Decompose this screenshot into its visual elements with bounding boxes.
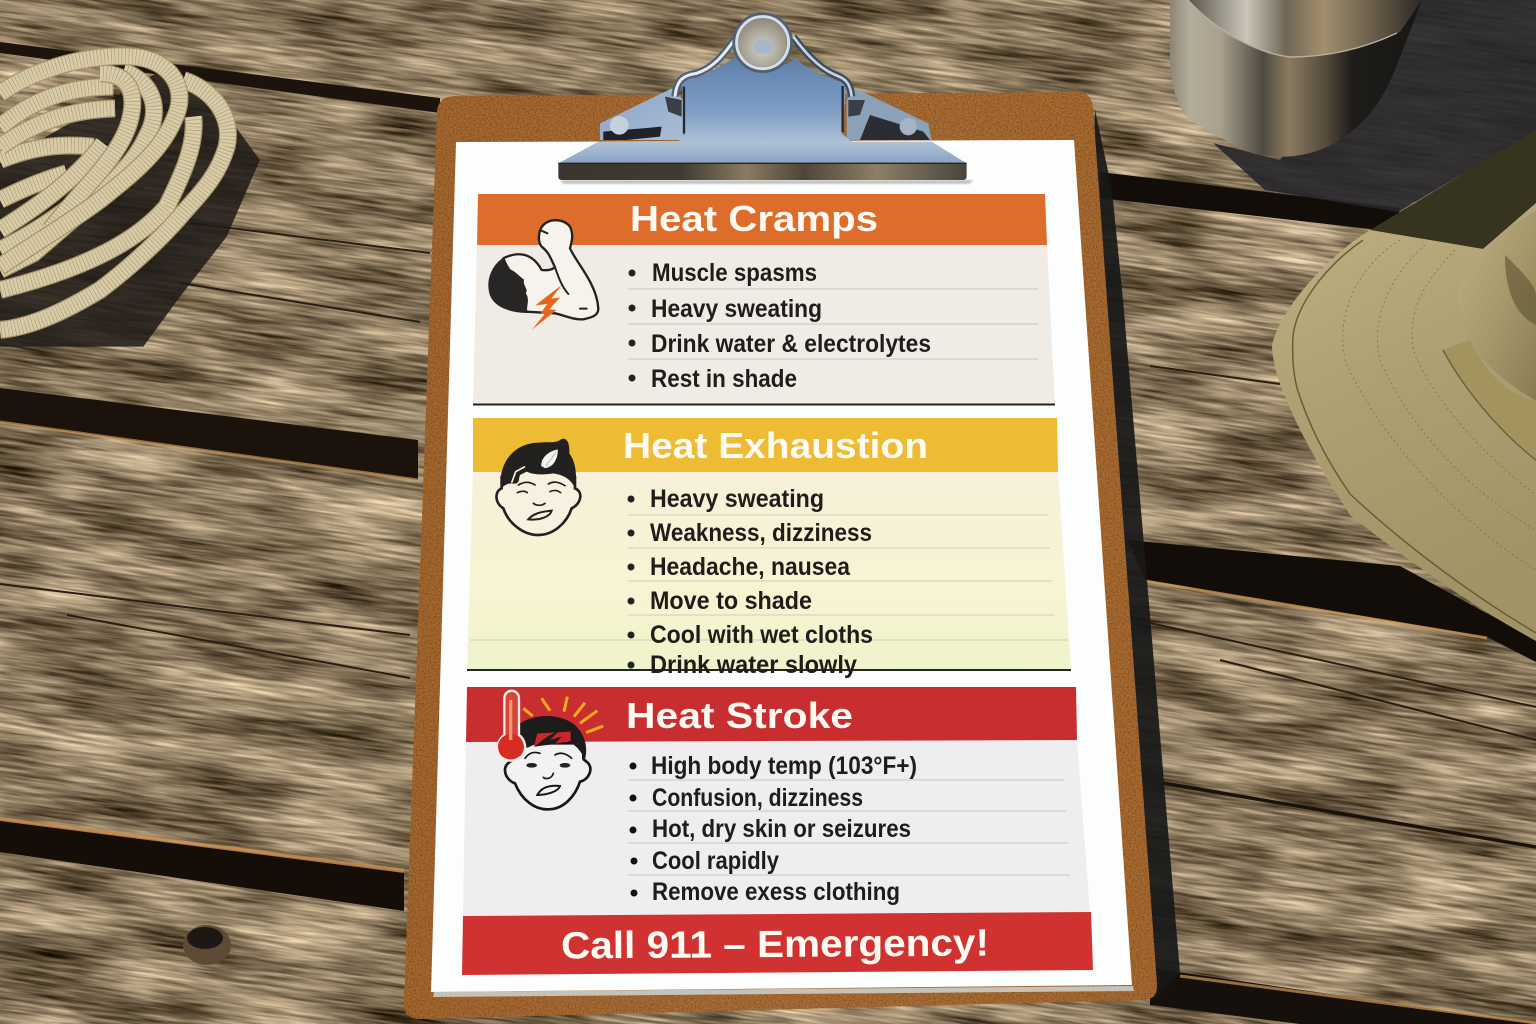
callout: call 911 banner: Call 911 – Emergency! bbox=[561, 923, 989, 967]
heading: Heat Cramps: Heat Cramps bbox=[630, 198, 878, 239]
heat cramps body background bbox=[473, 245, 1055, 405]
callout: call 911 banner bbox=[462, 912, 1093, 975]
clipboard backing board bbox=[400, 90, 1180, 1024]
icon: overheated face with thermometer bbox=[497, 691, 603, 809]
panel: heat stroke bbox=[463, 687, 1090, 916]
symptom list: heat stroke: Remove exess clothing bbox=[652, 878, 900, 906]
symptom list: heat stroke: Hot, dry skin or seizures bbox=[652, 815, 911, 843]
paper sheet bbox=[431, 140, 1134, 997]
heat stroke body background bbox=[463, 740, 1090, 916]
knot bbox=[183, 925, 231, 965]
symptom list: heat cramps bbox=[628, 259, 1038, 393]
divider under panel bbox=[467, 669, 1071, 671]
symptom list: heat cramps: Drink water & electrolytes bbox=[651, 330, 931, 358]
symptom list: heat stroke: High body temp (103°F+) bbox=[651, 752, 917, 780]
symptom list: heat exhaustion: Headache, nausea bbox=[650, 553, 851, 581]
symptom list: heat stroke bbox=[628, 752, 1070, 906]
panel: heat exhaustion bbox=[467, 418, 1071, 679]
heat exhaustion body background bbox=[467, 472, 1071, 670]
symptom list: heat cramps: Rest in shade bbox=[651, 365, 797, 393]
symptom list: heat exhaustion bbox=[470, 485, 1068, 679]
icon: flexed arm with lightning bolt bbox=[489, 220, 598, 330]
symptom list: heat exhaustion: Heavy sweating bbox=[650, 485, 824, 513]
heading: Heat Exhaustion: Heat Exhaustion bbox=[623, 425, 928, 466]
symptom list: heat cramps: Heavy sweating bbox=[651, 295, 822, 323]
divider under panel bbox=[473, 404, 1055, 406]
panel: heat cramps bbox=[473, 194, 1055, 405]
icon: chrome clipboard clip bbox=[558, 15, 973, 184]
symptom list: heat cramps: Muscle spasms bbox=[652, 259, 817, 287]
heat stroke header bar bbox=[466, 687, 1077, 742]
heat exhaustion header bar bbox=[473, 418, 1058, 472]
symptom list: heat stroke: Cool rapidly bbox=[652, 847, 779, 875]
icon: dizzy face with leaf bbox=[496, 439, 580, 535]
icon: coiled rope bbox=[0, 56, 260, 347]
symptom list: heat exhaustion: Cool with wet cloths bbox=[650, 621, 873, 649]
heading: Heat Stroke: Heat Stroke bbox=[626, 695, 853, 736]
heat cramps header bar bbox=[477, 194, 1047, 245]
icon: tan sun hat bbox=[1272, 130, 1536, 641]
symptom list: heat exhaustion: Weakness, dizziness bbox=[650, 519, 872, 547]
symptom list: heat exhaustion: Move to shade bbox=[650, 587, 812, 615]
symptom list: heat stroke: Confusion, dizziness bbox=[652, 784, 863, 812]
symptom list: heat exhaustion: Drink water slowly bbox=[650, 651, 857, 679]
icon: steel thermos bbox=[1170, 0, 1536, 212]
